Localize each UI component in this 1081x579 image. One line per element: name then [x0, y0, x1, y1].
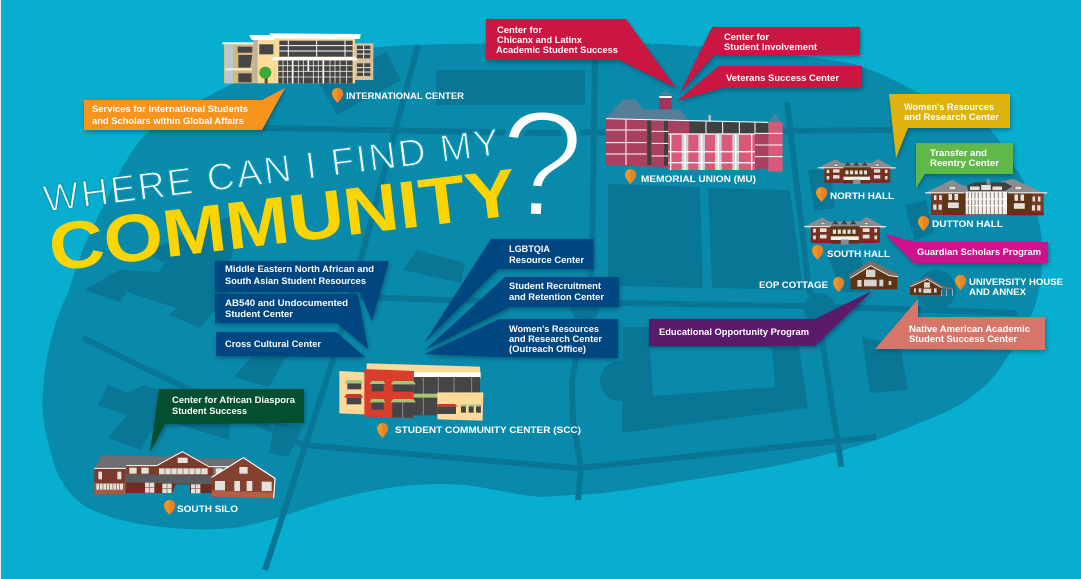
callout: student recruitment — [425, 277, 619, 350]
callout: cross cultural center: Cross Cultural Center — [225, 339, 322, 349]
callout: educational opportunity program: Educational Opportunity Program — [659, 327, 809, 337]
building: university house — [909, 276, 953, 296]
callout: women's resources: Women's Resources — [904, 102, 994, 112]
callout: lgbtqia — [425, 239, 593, 342]
title line: where can i find my: WHERE CAN I FIND MY — [41, 122, 502, 221]
label: south hall — [812, 245, 890, 260]
pin — [164, 500, 175, 515]
building: south hall — [804, 217, 886, 245]
callout: veterans: Veterans Success Center — [726, 73, 840, 83]
question mark: ? — [494, 77, 588, 251]
callout: middle eastern north african south asian: South Asian Student Resources — [225, 276, 366, 286]
callout: african diaspora — [150, 389, 304, 452]
callout: middle eastern north african south asian: Middle Eastern North African and — [225, 264, 374, 274]
title — [41, 77, 588, 286]
pin — [833, 277, 844, 292]
callout: women's resources outreach: Women's Resources — [509, 324, 599, 334]
callout: transfer and reentry: Reentry Center — [930, 158, 1000, 168]
callout: international services: and Scholars within Global Affairs — [92, 116, 244, 126]
callout: student involvement: Student Involvement — [724, 42, 817, 52]
pin — [918, 216, 929, 231]
pin — [377, 423, 388, 438]
callout: guardian scholars — [885, 234, 1048, 263]
callout: guardian scholars: Guardian Scholars Program — [917, 247, 1041, 257]
label: dutton hall — [918, 216, 1003, 231]
label: university house and annex: AND ANNEX — [969, 287, 1027, 298]
callout: women's resources — [889, 94, 1010, 158]
callout: international services: Services for International Students — [92, 104, 248, 114]
building: south silo — [94, 452, 275, 498]
building: eop cottage — [848, 260, 898, 289]
callout: chicanx latinx: Chicanx and Latinx — [497, 35, 582, 45]
callout: african diaspora: Center for African Diaspora — [172, 395, 296, 405]
callout: lgbtqia: LGBTQIA — [509, 244, 551, 254]
label: international center: INTERNATIONAL CENTER — [346, 91, 464, 102]
callout: cross cultural center — [216, 332, 365, 357]
callout: veterans — [677, 66, 862, 101]
label: memorial union — [625, 169, 756, 185]
label: south silo: SOUTH SILO — [177, 504, 238, 515]
label: eop cottage — [759, 277, 844, 292]
pin — [625, 169, 636, 184]
label: student community center — [377, 423, 581, 438]
building: dutton hall — [925, 178, 1047, 215]
callout: women's resources: and Research Center — [904, 112, 1000, 122]
city blocks — [84, 52, 956, 457]
label: university house and annex — [955, 275, 1063, 298]
callout: women's resources outreach: and Research Center — [509, 334, 603, 344]
building: international center — [222, 33, 373, 83]
building: student community center — [339, 363, 483, 421]
label: student community center: STUDENT COMMUNITY CENTER (SCC) — [395, 425, 581, 436]
pin — [812, 245, 823, 260]
callout: native american: Student Success Center — [909, 334, 1018, 344]
label: memorial union: MEMORIAL UNION (MU) — [641, 174, 756, 185]
callout: native american: Native American Academic — [909, 324, 1030, 334]
callout: african diaspora: Student Success — [172, 406, 247, 416]
title line: community: COMMUNITY — [45, 155, 520, 286]
roads — [83, 45, 1017, 570]
callout: ab540: Student Center — [225, 309, 294, 319]
callout: student involvement — [680, 27, 860, 93]
callout: women's resources outreach — [425, 319, 618, 358]
label: dutton hall: DUTTON HALL — [932, 219, 1003, 230]
label: university house and annex: UNIVERSITY HOUSE — [969, 277, 1063, 288]
pin — [816, 187, 827, 202]
callout: student recruitment: Student Recruitment — [509, 281, 601, 291]
building: memorial union — [606, 90, 783, 172]
label: international center — [332, 88, 464, 103]
label: south silo — [164, 500, 238, 515]
campus blob — [42, 42, 1043, 529]
callout: native american — [875, 299, 1045, 350]
callout: chicanx latinx — [486, 19, 676, 88]
callout: transfer and reentry — [916, 143, 1013, 188]
callout: chicanx latinx: Center for — [497, 25, 543, 35]
callout: women's resources outreach: (Outreach Office) — [509, 344, 586, 354]
label: eop cottage: EOP COTTAGE — [759, 280, 828, 291]
callout: middle eastern north african south asian — [215, 261, 389, 321]
pin — [955, 275, 966, 290]
callout: lgbtqia: Resource Center — [509, 255, 585, 265]
callout: ab540: AB540 and Undocumented — [225, 298, 348, 308]
callout: student involvement: Center for — [724, 32, 770, 42]
label: north hall — [816, 187, 894, 202]
callout: educational opportunity program — [649, 291, 872, 346]
callout: student recruitment: and Retention Center — [509, 292, 605, 302]
label: south hall: SOUTH HALL — [827, 249, 890, 260]
label: north hall: NORTH HALL — [830, 191, 894, 202]
callout: transfer and reentry: Transfer and — [930, 148, 987, 158]
callout: ab540 — [215, 294, 368, 349]
callout: chicanx latinx: Academic Student Success — [496, 45, 618, 55]
callout: international services — [84, 88, 285, 130]
pin — [332, 88, 343, 103]
building: north hall — [818, 159, 896, 184]
